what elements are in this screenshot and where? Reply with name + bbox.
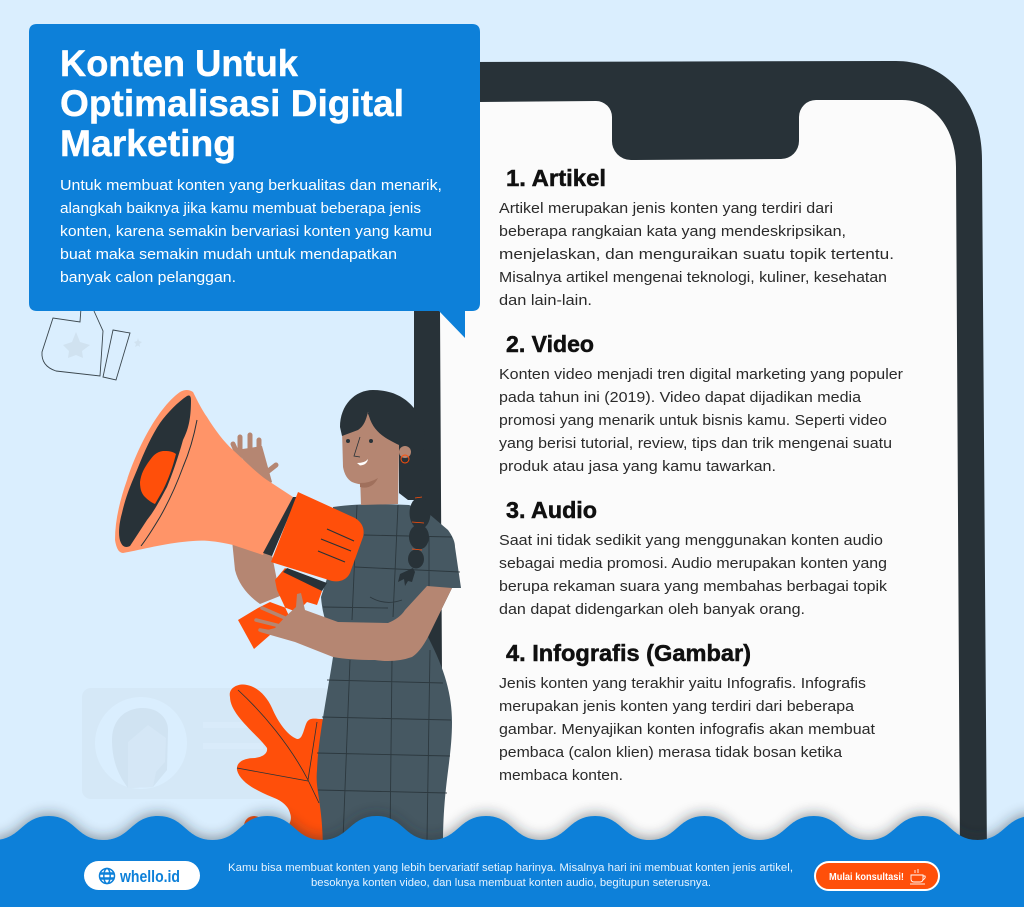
section: 3. Audio	[499, 497, 888, 618]
section: 1. Artikel	[499, 165, 894, 309]
intro text: konten, karena semakin bervariasi konten yang kamu	[60, 223, 432, 240]
back arm	[232, 540, 280, 604]
intro text: banyak calon pelanggan.	[60, 269, 236, 286]
ear	[399, 446, 411, 458]
section: 4. Infografis: Jenis konten yang terakhir yaitu Infografis. Infografis	[499, 675, 866, 692]
section: 2. Video: promosi yang menarik untuk bisnis kamu. Seperti video	[499, 412, 887, 429]
section: 2. Video: Konten video menjadi tren digital marketing yang populer	[499, 366, 903, 383]
footer note	[228, 862, 793, 889]
neck	[360, 450, 399, 505]
section: 4. Infografis: 4. Infografis (Gambar)	[506, 640, 751, 666]
icon: thumbs up outline	[42, 308, 142, 380]
section: 3. Audio: sebagai media promosi. Audio merupakan konten yang	[499, 555, 887, 572]
panel: intro speech bubble	[29, 24, 480, 338]
raised hand	[233, 435, 276, 488]
title	[60, 43, 404, 164]
megaphone inner	[140, 451, 176, 504]
ghost profile card	[82, 688, 332, 799]
chin shadow	[360, 478, 378, 488]
section: 4. Infografis: pembaca (calon klien) merasa tidak bosan ketika	[499, 744, 843, 761]
intro text: buat maka semakin mudah untuk mendapatkan	[60, 246, 397, 263]
button: Mulai konsultasi: Mulai konsultasi!	[829, 872, 904, 883]
footer wave band	[0, 816, 1024, 907]
section: 1. Artikel: Misalnya artikel mengenai teknologi, kuliner, kesehatan	[499, 269, 887, 286]
section: 1. Artikel: dan lain-lain.	[499, 292, 592, 309]
intro text: Untuk membuat konten yang berkualitas dan menarik,	[60, 177, 442, 194]
megaphone	[115, 390, 364, 649]
footer note: Kamu bisa membuat konten yang lebih bervariatif setiap harinya. Misalnya hari ini membuat konten jenis artikel,	[228, 862, 793, 874]
megaphone cone	[115, 390, 293, 555]
section: 2. Video: 2. Video	[506, 331, 594, 357]
logo pill	[84, 861, 200, 890]
title: Konten Untuk	[60, 43, 298, 84]
section: 3. Audio: Saat ini tidak sedikit yang menggunakan konten audio	[499, 532, 883, 549]
section: 1. Artikel: 1. Artikel	[506, 165, 606, 191]
intro text	[60, 177, 442, 286]
icon: globe	[100, 868, 114, 884]
megaphone handle	[238, 568, 322, 649]
face	[342, 412, 399, 485]
section: 2. Video: yang berisi tutorial, review, tips dan trik mengenai suatu	[499, 435, 892, 452]
hair	[340, 390, 425, 500]
phone frame	[414, 61, 987, 860]
leaf	[230, 685, 335, 845]
section: 3. Audio: berupa rekaman suara yang membahas berbagai topik	[499, 578, 888, 595]
illustration: woman with megaphone	[115, 390, 461, 845]
phone screen	[440, 100, 960, 860]
section: 2. Video: pada tahun ini (2019). Video dapat dijadikan media	[499, 389, 862, 406]
front arm and hand	[256, 586, 452, 661]
footer note: besoknya konten video, dan lusa membuat konten audio, begitupun seterusnya.	[311, 877, 711, 889]
section: 4. Infografis: membaca konten.	[499, 767, 623, 784]
section: 2. Video: produk atau jasa yang kamu tawarkan.	[499, 458, 776, 475]
section: 4. Infografis: merupakan jenis konten yang terdiri dari beberapa	[499, 698, 855, 715]
icon: coffee cup	[910, 869, 925, 884]
section: 2. Video	[499, 331, 903, 475]
hair back and braid	[398, 430, 430, 586]
section: 3. Audio: dan dapat didengarkan oleh banyak orang.	[499, 601, 805, 618]
section: 4. Infografis	[499, 640, 876, 784]
section: 1. Artikel: beberapa rangkaian kata yang mendeskripsikan,	[499, 223, 846, 240]
section: 1. Artikel: menjelaskan, dan menguraikan suatu topik tertentu.	[499, 246, 894, 263]
megaphone band	[263, 497, 297, 556]
button: Mulai konsultasi	[815, 862, 939, 890]
title: Marketing	[60, 123, 236, 164]
section: 1. Artikel: Artikel merupakan jenis konten yang terdiri dari	[499, 200, 833, 217]
megaphone mouth	[119, 396, 191, 547]
logo pill: whello.id	[119, 867, 180, 886]
face details	[346, 413, 409, 466]
section: 3. Audio: 3. Audio	[506, 497, 597, 523]
section: 4. Infografis: gambar. Menyajikan konten infografis akan membuat	[499, 721, 876, 738]
title: Optimalisasi Digital	[60, 83, 404, 124]
megaphone body	[271, 492, 364, 581]
intro text: alangkah baiknya jika kamu membuat beberapa jenis	[60, 200, 421, 217]
dress	[317, 504, 461, 845]
